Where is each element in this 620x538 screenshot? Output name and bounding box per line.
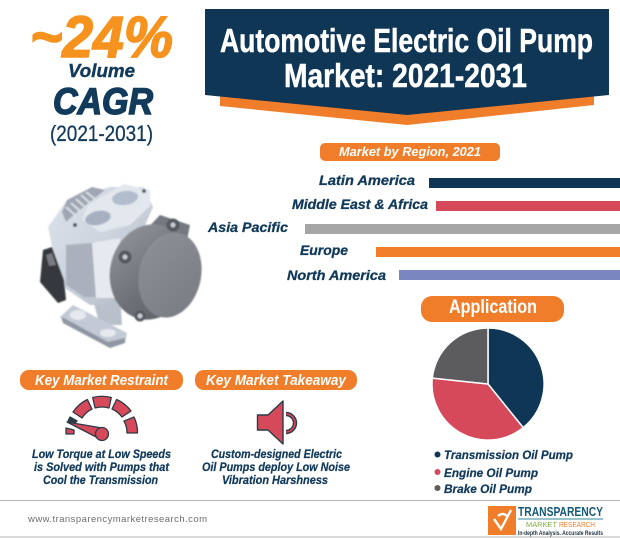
logo text bbox=[518, 504, 603, 537]
logo mark bbox=[488, 506, 516, 535]
takeaway text: Oil Pumps deploy Low Noise bbox=[202, 460, 350, 474]
legend: Brake Oil Pump bbox=[444, 482, 533, 496]
logo text: In-depth Analysis. Accurate Results bbox=[518, 530, 603, 537]
volume label: Volume bbox=[68, 61, 135, 81]
title text bbox=[220, 22, 593, 94]
takeaway text bbox=[202, 447, 350, 487]
region bar chart bbox=[207, 143, 620, 283]
bar: Europe: Europe bbox=[300, 243, 348, 258]
restraint text: Cool the Transmission bbox=[43, 473, 158, 487]
restraint text bbox=[32, 447, 171, 487]
bar: Middle East and Africa bbox=[292, 197, 620, 212]
legend bbox=[434, 448, 574, 496]
logo text: RESEARCH bbox=[559, 520, 595, 529]
bar: North America: North America bbox=[287, 268, 387, 283]
pie chart bbox=[432, 328, 544, 440]
bar: Asia Pacific: Asia Pacific bbox=[207, 220, 289, 235]
logo text: MARKET bbox=[526, 520, 557, 529]
heading pill: application bbox=[421, 296, 564, 322]
restraint text: is Solved with Pumps that bbox=[34, 460, 170, 474]
bar: Latin America: Latin America bbox=[319, 173, 416, 188]
heading pill: market by region: Market by Region, 2021 bbox=[339, 144, 481, 159]
title banner bbox=[205, 9, 609, 125]
heading pill: takeaway: Key Market Takeaway bbox=[206, 373, 347, 389]
icon: speaker bbox=[258, 401, 295, 444]
restraint text: Low Torque at Low Speeds bbox=[32, 447, 171, 461]
panel: key market takeaway bbox=[195, 370, 357, 487]
CAGR label: CAGR bbox=[53, 81, 153, 122]
heading pill: market by region bbox=[320, 143, 500, 161]
bar: Middle East and Africa: Middle East & Africa bbox=[292, 197, 429, 212]
bar: Europe bbox=[300, 243, 620, 258]
CAGR callout bbox=[30, 5, 173, 146]
takeaway text: Vibration Harshness bbox=[222, 473, 328, 487]
bar: Latin America bbox=[319, 173, 620, 188]
period label: (2021-2031) bbox=[50, 121, 153, 146]
website url: www.transparencymarketresearch.com bbox=[27, 514, 207, 525]
heading pill: application: Application bbox=[449, 297, 537, 318]
bar: North America bbox=[287, 268, 620, 283]
panel: key market restraint bbox=[20, 370, 183, 487]
illustration: electric oil pump bbox=[40, 184, 209, 348]
legend: Transmission Oil Pump bbox=[444, 448, 574, 462]
title text: Market: 2021-2031 bbox=[284, 57, 527, 94]
takeaway text: Custom-designed Electric bbox=[211, 447, 342, 461]
heading pill: restraint: Key Market Restraint bbox=[35, 373, 169, 389]
icon: speedometer gauge bbox=[66, 396, 138, 440]
legend: Engine Oil Pump bbox=[444, 466, 539, 480]
growth figure: ~24% bbox=[30, 5, 173, 70]
bar: Asia Pacific bbox=[207, 220, 620, 235]
logo: Transparency Market Research bbox=[488, 504, 603, 537]
panel: application bbox=[421, 296, 574, 496]
